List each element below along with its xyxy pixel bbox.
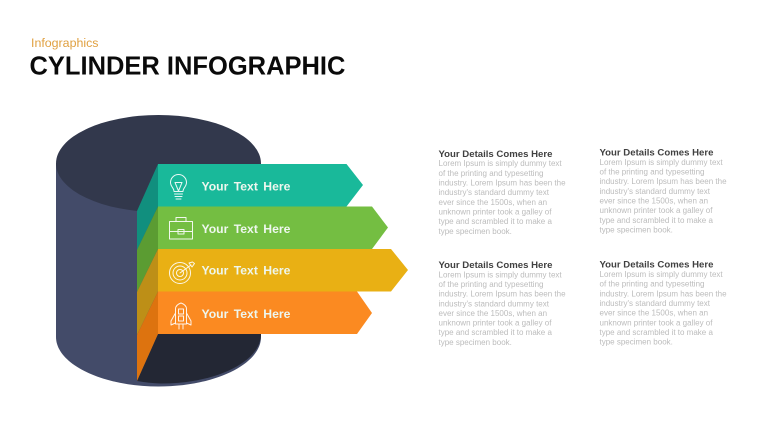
ribbon side faces	[137, 164, 158, 381]
text block: bottom right	[600, 259, 727, 347]
text block: bottom right: Lorem Ipsum is simply dummy text	[600, 270, 723, 279]
ribbon label: Your Text Here	[202, 264, 291, 278]
side: yellow	[137, 249, 158, 335]
text block: top left: industry's standard dummy text	[438, 188, 550, 197]
text block: bottom left: type and scrambled it to make a	[438, 328, 552, 337]
text block: bottom right: Your Details Comes Here	[600, 259, 713, 270]
title: CYLINDER INFOGRAPHIC	[30, 52, 345, 80]
text block: bottom right: industry's standard dummy text	[600, 299, 711, 308]
text block: top left: of the printing and typesetting	[438, 169, 543, 178]
text block: top right: ever since the 1500s, when an	[600, 196, 708, 206]
text block: bottom left: ever since the 1500s, when an	[438, 309, 547, 318]
text block: top right: Lorem Ipsum is simply dummy text	[600, 158, 723, 167]
text block: top left: unknown printer took a galley of	[438, 207, 552, 216]
icon: light bulb	[170, 174, 186, 199]
text block: top left: Lorem Ipsum is simply dummy text	[438, 159, 562, 168]
text block: bottom left: type specimen book.	[438, 338, 512, 347]
text block: top left: Your Details Comes Here	[438, 149, 552, 160]
ribbon label: Your Text Here	[202, 307, 291, 321]
text block: bottom left: Your Details Comes Here	[438, 260, 552, 271]
icon: briefcase	[170, 218, 192, 239]
text block: bottom left: industry. Lorem Ipsum has been the	[438, 290, 566, 299]
side: green	[137, 206, 158, 292]
text block: bottom left	[438, 260, 566, 347]
text block: top right: type and scrambled it to make a	[600, 216, 713, 225]
text block: bottom right: ever since the 1500s, when an	[600, 309, 708, 318]
icon: target	[170, 262, 194, 284]
text block: top right: industry's standard dummy text	[600, 187, 711, 196]
ribbon label: Your Text Here	[202, 180, 291, 194]
text block: top left: ever since the 1500s, when an	[438, 198, 547, 207]
text block: top right: industry. Lorem Ipsum has been the	[600, 177, 727, 186]
text block: top left: industry. Lorem Ipsum has been the	[438, 178, 566, 188]
ribbon: yellow	[158, 249, 408, 292]
cylinder	[56, 115, 261, 386]
icon: rocket	[171, 303, 191, 329]
text block: top right: type specimen book.	[600, 225, 673, 234]
cylinder top	[56, 115, 261, 212]
text block: top right: of the printing and typesetting	[600, 168, 704, 177]
text block: top right	[600, 148, 727, 234]
text block: top right: unknown printer took a galley of	[600, 206, 713, 215]
text block: top left: type specimen book.	[438, 227, 512, 236]
text block: top right: Your Details Comes Here	[600, 148, 713, 158]
cylinder body	[56, 163, 261, 386]
text block: bottom left: of the printing and typesetting	[438, 280, 543, 289]
text block: bottom right: type specimen book.	[600, 338, 673, 347]
ribbon: orange	[158, 292, 372, 334]
text block: top left: type and scrambled it to make a	[438, 217, 552, 226]
text block: bottom right: type and scrambled it to make a	[600, 328, 713, 337]
ribbon: green	[158, 206, 388, 249]
kicker label: Infographics	[31, 36, 99, 50]
text block: top left	[438, 149, 566, 236]
text block: bottom left: unknown printer took a galley of	[438, 319, 552, 328]
text block: bottom right: industry. Lorem Ipsum has been the	[600, 289, 727, 298]
side: teal	[137, 164, 158, 250]
side: orange	[137, 292, 158, 381]
ribbon: teal	[158, 164, 363, 206]
ribbon label: Your Text Here	[202, 222, 291, 236]
text block: bottom left: Lorem Ipsum is simply dummy text	[438, 270, 562, 279]
cylinder inner floor	[137, 334, 261, 384]
text block: bottom right: of the printing and typesetting	[600, 280, 704, 289]
text block: bottom right: unknown printer took a galley of	[600, 318, 713, 327]
text block: bottom left: industry's standard dummy text	[438, 299, 550, 308]
